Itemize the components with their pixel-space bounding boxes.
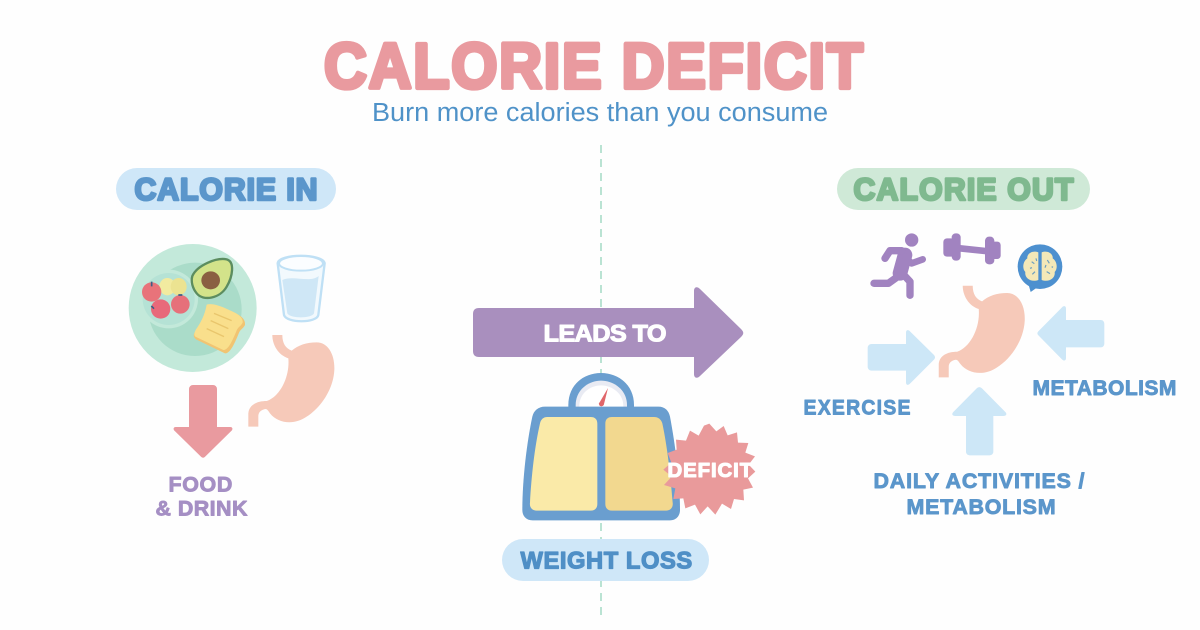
- arrow: down: [174, 385, 232, 458]
- label: exercise: EXERCISE: [804, 396, 910, 420]
- heading: calorie in: [116, 168, 336, 210]
- title: CALORIE DEFICIT: [324, 31, 863, 103]
- label: food and drink: FOOD: [168, 473, 232, 496]
- subtitle: Burn more calories than you consume: [372, 99, 828, 127]
- icon: dumbbell: [943, 233, 1001, 264]
- heading: calorie out: CALORIE OUT: [854, 172, 1074, 207]
- label: food and drink: [156, 472, 248, 520]
- arrow: leads to: [473, 287, 743, 378]
- icon: brain: [1018, 244, 1062, 292]
- panel: calorie in: [116, 168, 336, 520]
- icon: stomach: [939, 286, 1025, 377]
- label: metabolism: METABOLISM: [1032, 376, 1176, 400]
- label: daily activities / metabolism: [874, 469, 1085, 519]
- icon: runner: [874, 233, 923, 295]
- label: daily activities / metabolism: DAILY ACTIVITIES /: [874, 469, 1085, 493]
- arrow: leads to: LEADS TO: [544, 321, 667, 347]
- arrow: from metabolism: [1037, 306, 1104, 360]
- arrow: from daily activities: [952, 387, 1006, 455]
- heading: calorie in: CALORIE IN: [134, 172, 318, 207]
- panel: center result: [473, 287, 755, 581]
- label: weight loss: WEIGHT LOSS: [520, 548, 692, 575]
- panel: calorie out: [804, 168, 1176, 519]
- icon: bathroom scale: [522, 373, 680, 520]
- badge: deficit: [663, 424, 755, 515]
- icon: glass of water: [278, 256, 325, 321]
- badge: deficit: DEFICIT: [668, 460, 753, 482]
- arrow: from exercise: [868, 330, 935, 385]
- label: daily activities / metabolism: METABOLISM: [906, 495, 1056, 519]
- label: food and drink: & DRINK: [156, 497, 248, 520]
- icon: stomach: [248, 335, 334, 427]
- icon: plate of food: [129, 244, 257, 372]
- label: weight loss: [502, 539, 709, 581]
